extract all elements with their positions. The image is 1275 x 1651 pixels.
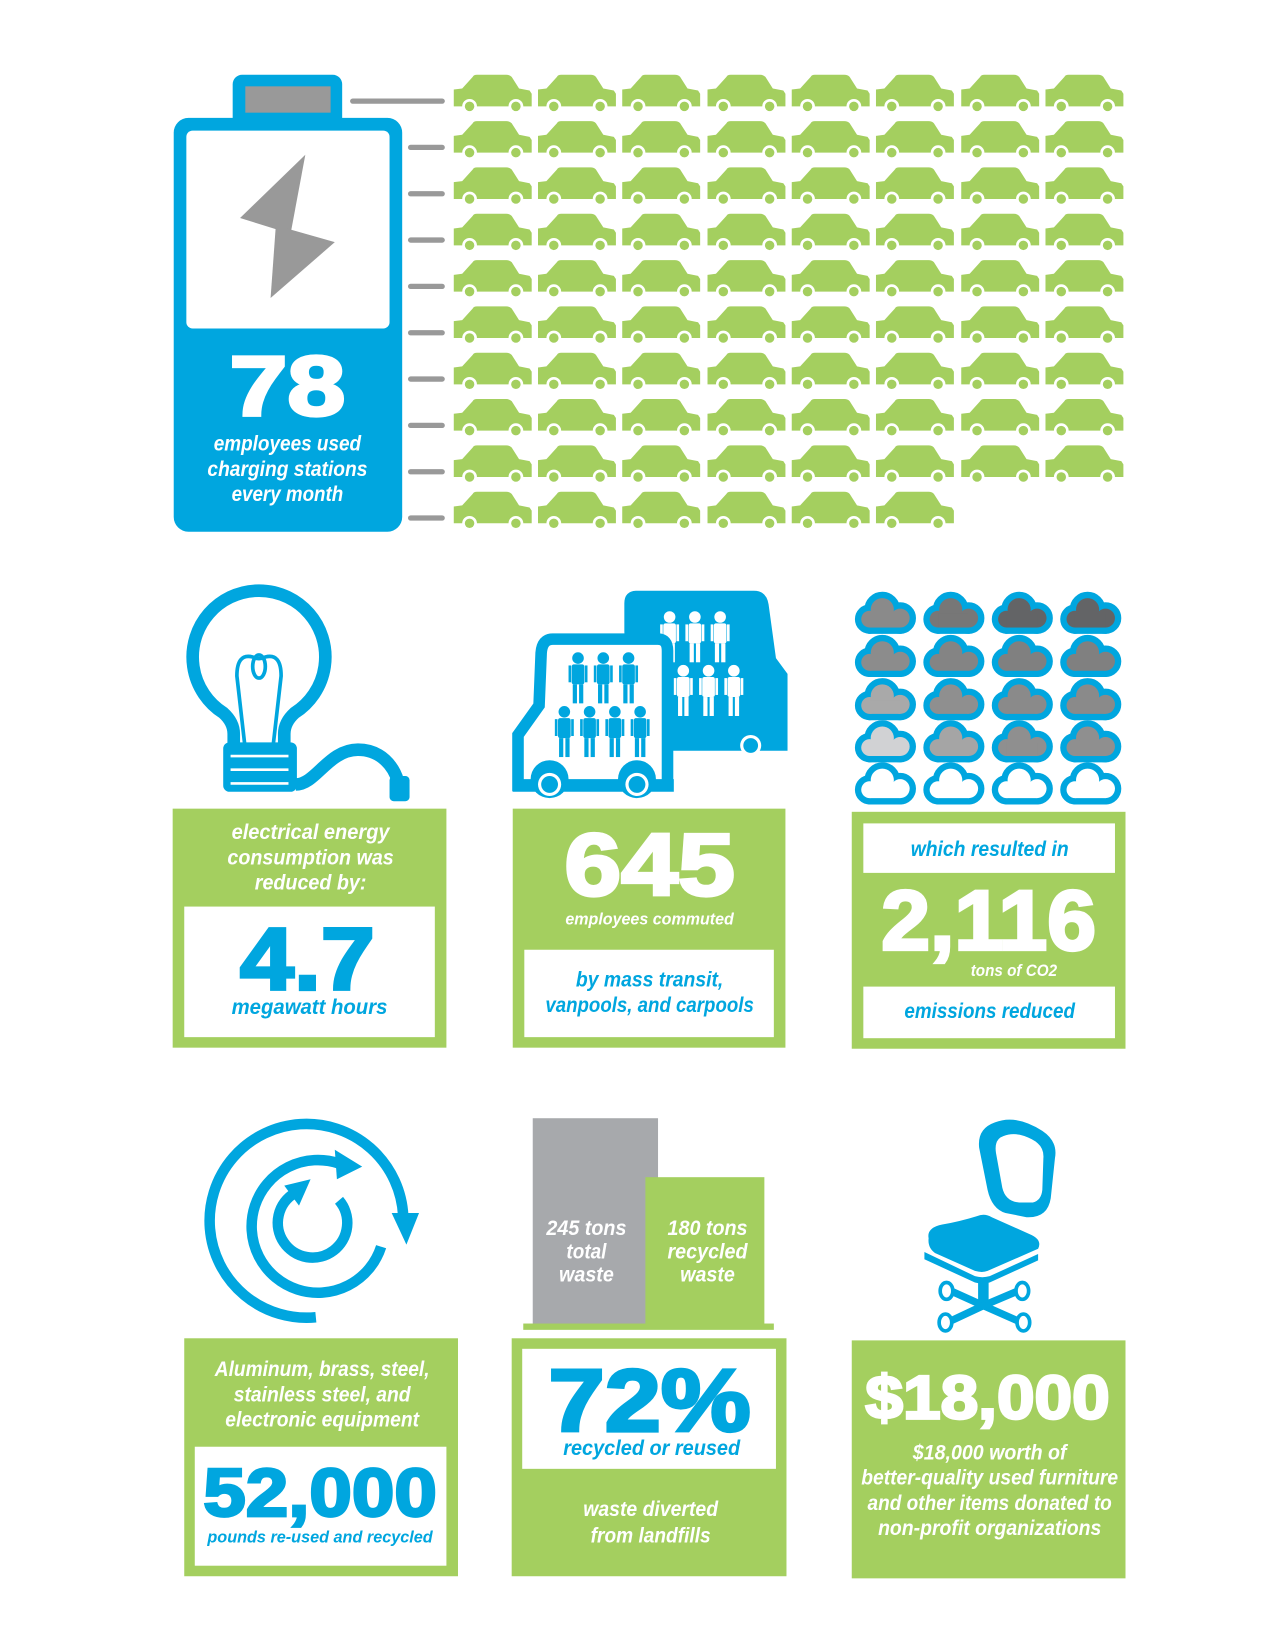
panel: metals recycled: pounds re-used and recycled bbox=[206, 1528, 433, 1547]
icon: buses with commuters bbox=[513, 591, 788, 798]
connector lines bbox=[353, 101, 442, 518]
panel: furniture donated: better-quality used furniture bbox=[861, 1467, 1118, 1490]
chart: waste bars bbox=[523, 1118, 774, 1330]
battery caption: every month bbox=[232, 483, 343, 506]
panel: waste diverted: recycled or reused bbox=[563, 1437, 741, 1460]
panel: CO2: 2,116 bbox=[881, 874, 1096, 968]
chart: waste bars: waste bbox=[559, 1263, 614, 1286]
icon: light bulb bbox=[193, 591, 410, 801]
panel: waste diverted: waste diverted bbox=[583, 1498, 719, 1521]
value: 4.7 megawatt hours: 4.7 bbox=[240, 910, 375, 1009]
panel: waste diverted: 72% bbox=[549, 1351, 751, 1450]
panel: CO2: tons of CO2 bbox=[971, 961, 1058, 980]
panel: energy: electrical energy bbox=[232, 821, 391, 844]
panel: commuters: vanpools, and carpools bbox=[545, 994, 754, 1017]
panel: energy: reduced by: bbox=[255, 872, 366, 895]
value: 4.7 megawatt hours: megawatt hours bbox=[232, 996, 387, 1019]
chart: waste bars: recycled bbox=[668, 1240, 749, 1263]
panel: CO2 bbox=[852, 812, 1125, 1049]
panel: waste diverted bbox=[512, 1338, 786, 1576]
panel: metals recycled: Aluminum, brass, steel, bbox=[214, 1358, 430, 1381]
panel: furniture donated: $18,000 bbox=[865, 1363, 1110, 1431]
panel: energy: consumption was bbox=[227, 846, 394, 869]
chart: waste bars: 180 tons bbox=[668, 1217, 748, 1240]
panel: energy bbox=[173, 809, 446, 1048]
panel: CO2: emissions reduced bbox=[904, 1000, 1076, 1023]
icon: office chair bbox=[924, 1120, 1055, 1331]
panel: furniture donated bbox=[852, 1340, 1125, 1578]
panel: furniture donated: and other items donated to bbox=[868, 1492, 1112, 1515]
panel: furniture donated: $18,000 worth of bbox=[912, 1441, 1068, 1464]
battery caption bbox=[207, 433, 367, 506]
panel: metals recycled: electronic equipment bbox=[225, 1409, 420, 1432]
panel: CO2: which resulted in bbox=[911, 838, 1069, 861]
panel: commuters: employees commuted bbox=[565, 909, 735, 928]
icon: cloud grid bbox=[861, 598, 1115, 798]
chart: waste bars: 245 tons bbox=[545, 1217, 626, 1240]
icon: recycle arrows bbox=[210, 1124, 419, 1318]
battery caption: charging stations bbox=[207, 458, 367, 481]
panel: commuters: 645 bbox=[564, 815, 735, 914]
panel: commuters: by mass transit, bbox=[576, 969, 723, 992]
battery bbox=[174, 75, 402, 532]
panel: metals recycled: 52,000 bbox=[203, 1456, 437, 1531]
icon: lightning bolt bbox=[240, 155, 335, 298]
panel: waste diverted: from landfills bbox=[591, 1525, 711, 1548]
battery caption: employees used bbox=[214, 433, 362, 456]
battery number: 78 bbox=[230, 339, 345, 433]
panel: metals recycled bbox=[184, 1338, 458, 1576]
panel: furniture donated: non-profit organizations bbox=[878, 1517, 1101, 1540]
chart: waste bars: waste bbox=[680, 1263, 735, 1286]
car grid bbox=[454, 75, 1123, 531]
panel: commuters bbox=[513, 809, 785, 1048]
chart: waste bars: total bbox=[566, 1240, 607, 1263]
panel: metals recycled: stainless steel, and bbox=[234, 1383, 412, 1406]
